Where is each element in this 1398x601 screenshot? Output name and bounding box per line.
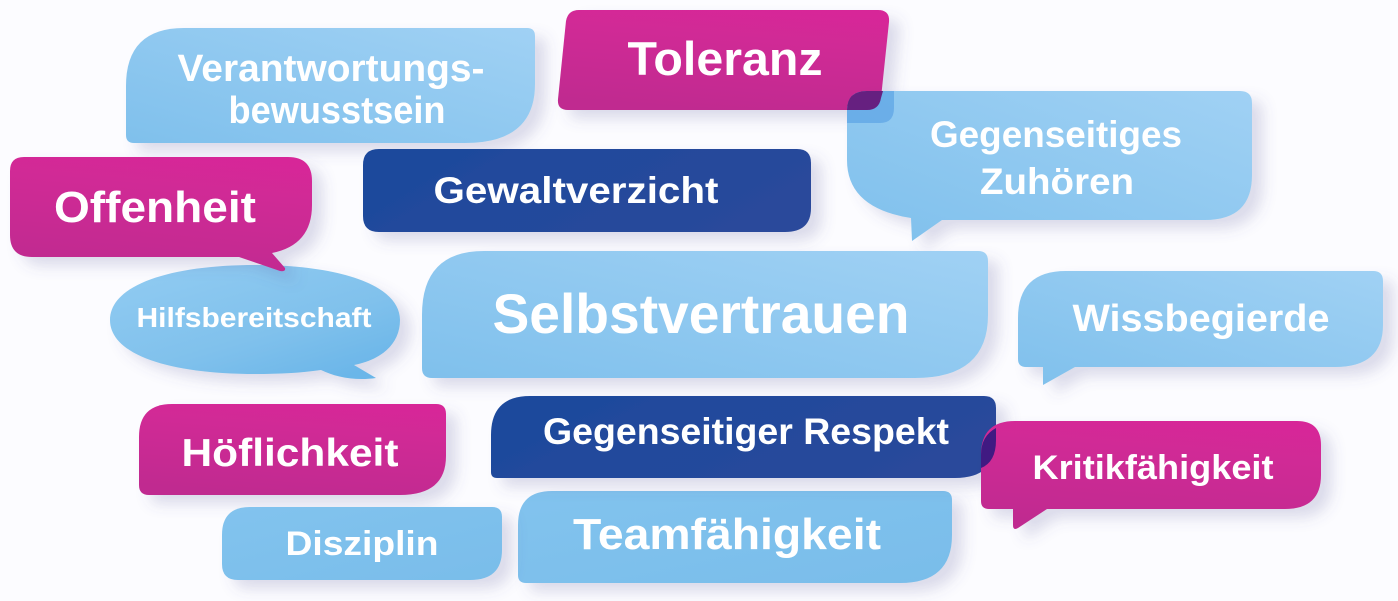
bubble: Verantwortungsbewusstsein: Verantwortungs-	[178, 48, 484, 90]
bubble: Gegenseitiges Zuhören: Zuhören	[980, 161, 1134, 202]
bubble: Selbstvertrauen	[422, 251, 988, 378]
bubble: Gewaltverzicht: Gewaltverzicht	[434, 170, 718, 211]
overlap: Respekt and Kritikfähigkeit	[981, 428, 996, 468]
bubble: Offenheit: Offenheit	[54, 183, 256, 232]
bubble: Hilfsbereitschaft	[110, 265, 400, 379]
bubble: Disziplin: Disziplin	[286, 525, 438, 563]
bubble: Kritikfähigkeit	[981, 421, 1321, 529]
bubble: Toleranz: Toleranz	[628, 32, 822, 85]
bubble: Verantwortungsbewusstsein: bewusstsein	[228, 90, 446, 132]
bubble: Selbstvertrauen: Selbstvertrauen	[492, 282, 910, 345]
bubble: Gegenseitiges Zuhören	[847, 91, 1252, 241]
bubble: Teamfähigkeit: Teamfähigkeit	[573, 510, 881, 559]
bubble: Offenheit	[10, 157, 312, 271]
bubble: Gewaltverzicht	[363, 149, 811, 232]
bubble: Toleranz	[558, 10, 889, 110]
overlap shadow: Toleranz on blue bubble	[847, 91, 894, 123]
bubble: Wissbegierde: Wissbegierde	[1072, 298, 1330, 340]
bubble: Gegenseitiger Respekt: Gegenseitiger Respekt	[543, 411, 949, 452]
bubble: Verantwortungsbewusstsein	[126, 28, 535, 143]
bubble: Wissbegierde	[1018, 271, 1383, 385]
bubble: Hilfsbereitschaft: Hilfsbereitschaft	[136, 302, 372, 333]
bubble: Gegenseitiger Respekt	[491, 396, 996, 478]
bubble: Höflichkeit: Höflichkeit	[182, 432, 398, 475]
bubble: Gegenseitiges Zuhören: Gegenseitiges	[930, 114, 1182, 155]
bubble: Disziplin	[222, 507, 502, 580]
bubble: Höflichkeit	[139, 404, 446, 495]
bubble: Kritikfähigkeit: Kritikfähigkeit	[1032, 449, 1274, 487]
overlap: Toleranz and blue bubble	[847, 91, 883, 110]
bubble: Teamfähigkeit	[518, 491, 952, 583]
